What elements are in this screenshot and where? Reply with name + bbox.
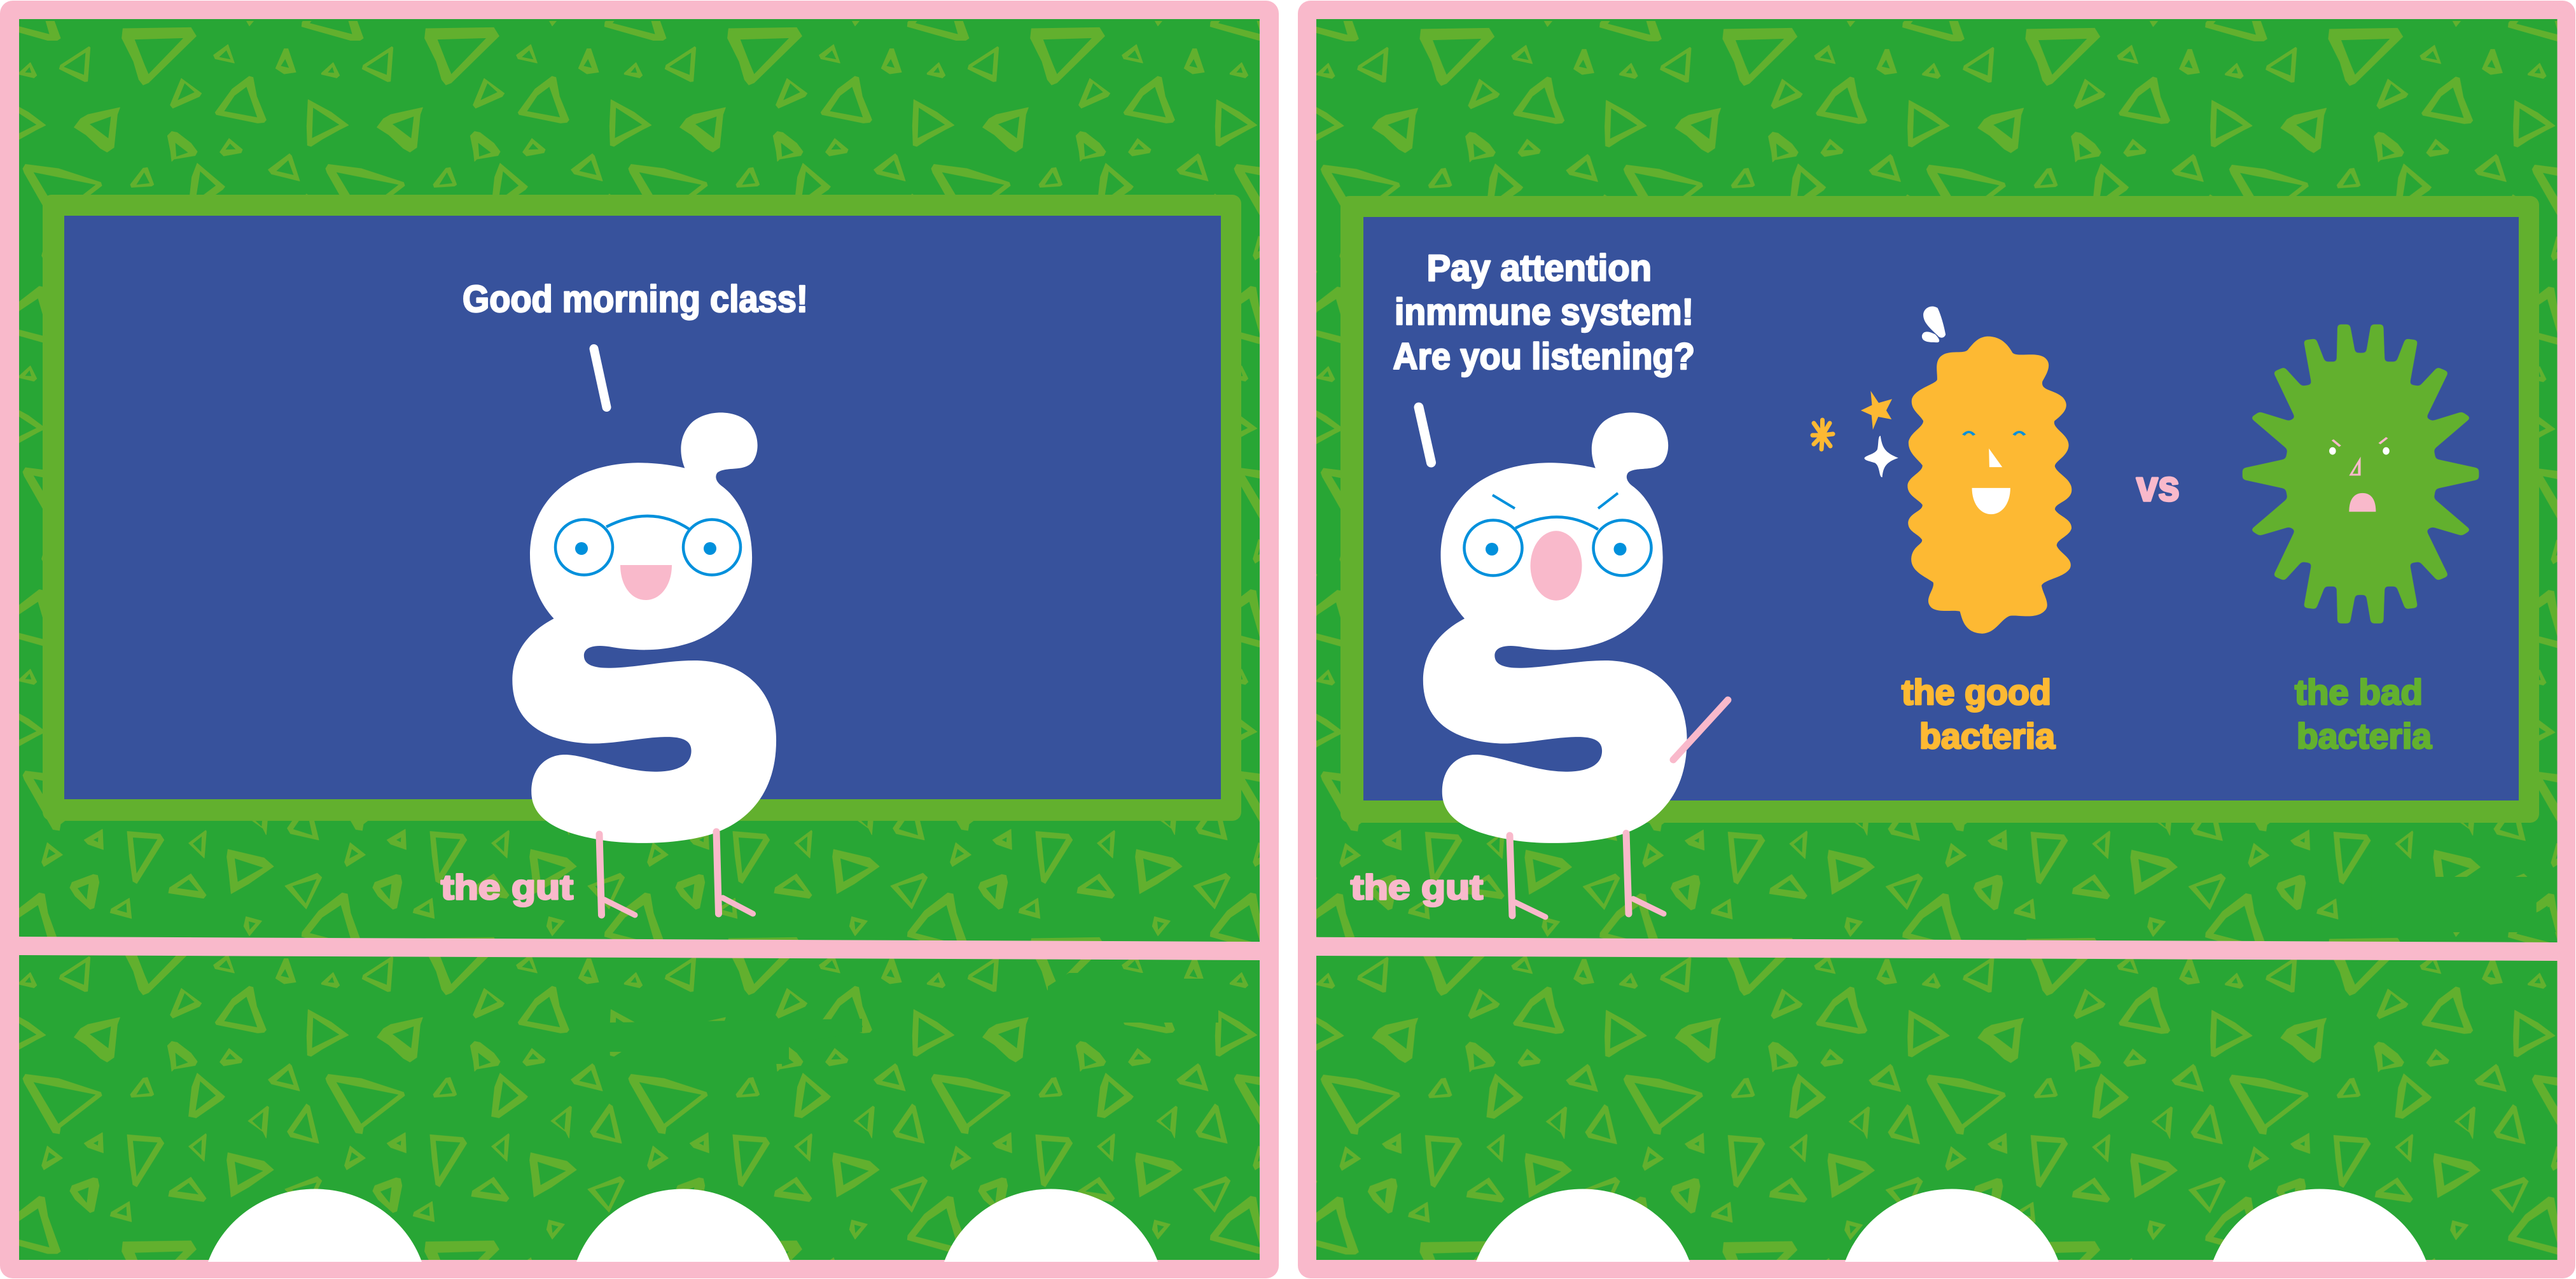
speech text: pay attention: Pay attention bbox=[1427, 248, 1652, 289]
label: the gut right: the gut bbox=[1351, 867, 1483, 907]
mouth: smile bbox=[620, 565, 672, 600]
character: the gut, happy bbox=[512, 412, 776, 915]
label: the good bacteria: bacteria bbox=[1919, 716, 2056, 756]
face: bad bacteria bbox=[2329, 438, 2390, 512]
white arch 1 right bbox=[1476, 1189, 1690, 1262]
label: the bad bacteria: the bad bbox=[2295, 672, 2423, 712]
panel: right comic frame bbox=[1298, 1, 2575, 1278]
speech text: good morning: Good morning class! bbox=[463, 278, 808, 320]
divider: left bbox=[19, 937, 1260, 960]
eyes: right bbox=[1486, 543, 1626, 556]
label: the good bacteria: the good bbox=[1902, 672, 2051, 712]
legs: right bbox=[1510, 834, 1664, 917]
chalkboard: right bbox=[1340, 196, 2539, 823]
nose: good bacteria bbox=[1989, 449, 2002, 467]
icon: yellow asterisk bbox=[1813, 420, 1833, 449]
glasses: right bbox=[1465, 517, 1652, 575]
icon: exclamation mark bbox=[1922, 306, 1946, 342]
white arch 2 right bbox=[1845, 1189, 2059, 1262]
white arch 3 right bbox=[2213, 1189, 2426, 1262]
speech text: pay attention bbox=[1393, 248, 1695, 377]
label: the gut left: the gut bbox=[441, 867, 573, 907]
white arch 1 left bbox=[208, 1189, 422, 1262]
character: good bacteria bbox=[1907, 337, 2071, 634]
legs: left bbox=[599, 832, 753, 915]
eyes: good bacteria bbox=[1963, 432, 2024, 435]
panel: left comic frame bbox=[0, 1, 1279, 1278]
icon: yellow star bbox=[1861, 391, 1892, 430]
white arch 2 left bbox=[576, 1189, 790, 1262]
character: the gut, stern teacher bbox=[1423, 412, 1728, 917]
speech tick: right bbox=[1419, 407, 1431, 463]
speech tick: left bbox=[594, 349, 607, 407]
eyes: left bbox=[575, 542, 716, 555]
eyebrows: angry bbox=[1493, 493, 1618, 508]
divider: right bbox=[1316, 937, 2558, 961]
label: the bad bacteria bbox=[2295, 672, 2432, 756]
icon: white sparkle bbox=[1864, 436, 1898, 477]
speech text: pay attention: Are you listening? bbox=[1393, 336, 1695, 377]
white arch 3 left bbox=[944, 1189, 1158, 1262]
chalkboard: left bbox=[43, 195, 1241, 821]
glasses: left bbox=[555, 516, 741, 575]
mouth: open bbox=[1531, 531, 1582, 601]
label: the bad bacteria: bacteria bbox=[2297, 716, 2432, 756]
speech text: pay attention: inmmune system! bbox=[1395, 291, 1694, 333]
label: the good bacteria bbox=[1902, 672, 2056, 756]
character: bad bacteria bbox=[2243, 325, 2479, 624]
label: vs: vs bbox=[2136, 462, 2180, 510]
mouth: good bacteria bbox=[1972, 488, 2010, 514]
arm: pointer bbox=[1673, 700, 1728, 760]
